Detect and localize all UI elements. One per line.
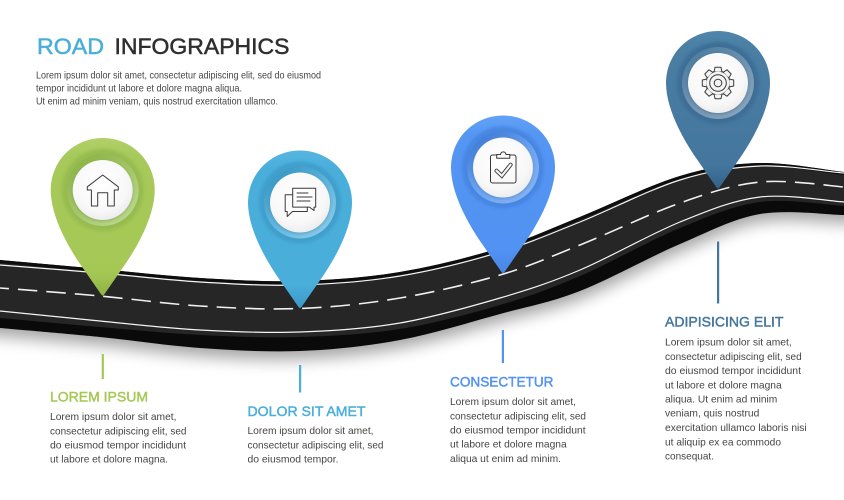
connector: light blue — [299, 365, 301, 392]
step 3 text: Lorem ipsum dolor sit amet, — [450, 397, 576, 408]
step 3 text: do eiusmod tempor incididunt — [450, 425, 586, 436]
pin 1: green home — [51, 138, 155, 296]
connector: blue — [502, 330, 504, 363]
step 1 text — [50, 388, 187, 466]
step 3 text: aliqua ut enim ad minim. — [450, 454, 561, 465]
step 2 text: do eiusmod tempor. — [248, 455, 338, 466]
connector: navy — [717, 242, 719, 304]
pin 2: light blue chat — [248, 150, 352, 308]
step 2 text: DOLOR SIT AMET — [248, 403, 366, 419]
step 1 text: consectetur adipiscing elit, sed — [50, 426, 187, 437]
step 4 text: ut labore et dolore magna — [665, 380, 782, 391]
pin 4: navy gear — [666, 31, 770, 188]
intro text — [36, 70, 321, 108]
step 4 text: consequat. — [665, 451, 714, 462]
step 3 text: consectetur adipiscing elit, sed — [450, 411, 586, 422]
step 4 text: exercitation ullamco laboris nisi — [665, 423, 807, 434]
icon: chat bubbles — [285, 188, 316, 216]
title: ROAD — [37, 34, 104, 59]
step 1 text: LOREM IPSUM — [50, 388, 148, 404]
step 4 text: veniam, quis nostrud — [665, 409, 760, 420]
pin 3: blue clipboard — [451, 116, 555, 273]
step 1 text: ut labore et dolore magna. — [50, 455, 168, 466]
connector: green — [102, 354, 104, 379]
icon: house — [87, 175, 118, 206]
road — [0, 0, 844, 359]
icon: gear — [702, 67, 734, 99]
step 3 text: ut labore et dolore magna — [450, 440, 567, 451]
step 2 text: consectetur adipiscing elit, sed — [248, 440, 384, 451]
intro text: tempor incididunt ut labore et dolore magna aliqua. — [36, 84, 242, 94]
icon: clipboard with check — [490, 152, 516, 183]
step 2 text — [248, 403, 384, 466]
step 3 text: CONSECTETUR — [450, 374, 554, 390]
step 4 text: consectetur adipiscing elit, sed — [665, 352, 802, 363]
title: INFOGRAPHICS — [114, 34, 290, 59]
step 1 text: Lorem ipsum dolor sit amet, — [50, 412, 176, 423]
step 1 text: do eiusmod tempor incididunt — [50, 440, 186, 452]
step 2 text: Lorem ipsum dolor sit amet, — [248, 426, 374, 437]
title — [37, 34, 290, 59]
intro text: Lorem ipsum dolor sit amet, consectetur adipiscing elit, sed do eiusmod — [36, 70, 321, 82]
intro text: Ut enim ad minim veniam, quis nostrud exercitation ullamco. — [36, 96, 278, 108]
step 4 text: aliqua. Ut enim ad minim — [665, 394, 777, 405]
step 4 text — [665, 314, 807, 462]
step 4 text: Lorem ipsum dolor sit amet, — [665, 338, 792, 349]
step 4 text: ut aliquip ex ea commodo — [665, 437, 781, 448]
step 4 text: do eiusmod tempor incididunt — [665, 366, 801, 377]
step 4 text: ADIPISICING ELIT — [665, 314, 784, 330]
step 3 text — [450, 374, 586, 465]
